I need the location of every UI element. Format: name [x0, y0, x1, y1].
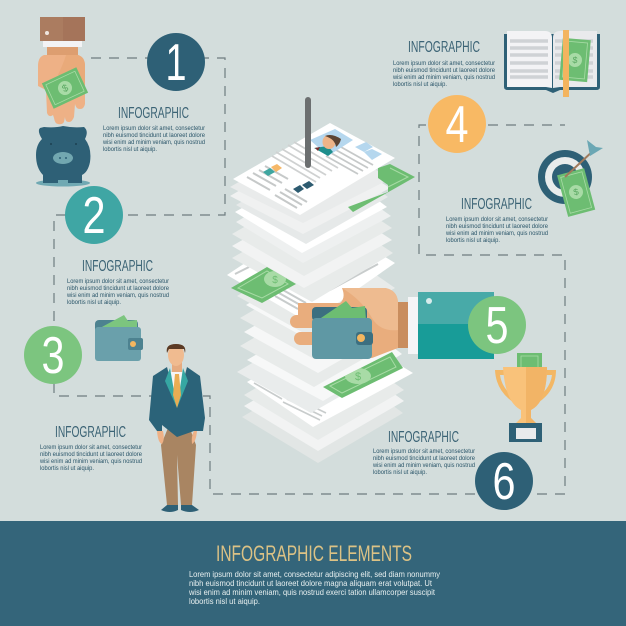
footer body text	[188, 569, 441, 606]
stack money left	[231, 267, 296, 303]
footer body text: lobortis nisl ut aiquip.	[189, 596, 260, 606]
text block 2: INFOGRAPHIC	[82, 258, 153, 275]
text block 1: wisi enim ad minim veniam, quis nostrud	[102, 139, 206, 146]
text block 6: nibh euismod tincidunt ut laoreet dolore	[373, 455, 476, 462]
circle 3: 3	[42, 327, 64, 385]
text block 3: Lorem ipsum dolor sit amet, consectetur	[40, 444, 142, 451]
text block 2: nibh euismod tincidunt ut laoreet dolore	[67, 285, 170, 292]
text block 3	[39, 424, 143, 472]
footer band	[0, 521, 626, 626]
stack money right	[323, 352, 403, 398]
text block 6: lobortis nisl ut aiquip.	[373, 469, 427, 476]
circle 2	[65, 186, 123, 245]
icon: piggy bank	[36, 126, 90, 186]
text block 4: lobortis nisl ut aiquip.	[393, 81, 447, 88]
nail spike	[305, 97, 311, 168]
icon: hand giving money: $	[61, 83, 71, 95]
footer body text: nibh euismod tincidunt ut laoreet dolore magna aliquam erat volutpat. Ut	[189, 578, 433, 588]
circle 1: 1	[166, 34, 186, 92]
stack money left: $	[272, 275, 278, 286]
text block 1: lobortis nisl ut aiquip.	[103, 146, 157, 153]
text block 5: Lorem ipsum dolor sit amet, consectetur	[446, 216, 548, 223]
text block 4: Lorem ipsum dolor sit amet, consectetur	[393, 60, 495, 67]
text block 6	[372, 429, 476, 476]
dashed connector path	[54, 58, 565, 494]
text block 1: INFOGRAPHIC	[118, 105, 189, 122]
footer body text: Lorem ipsum dolor sit amet, consectetur adipiscing elit, sed diam nonummy	[189, 569, 441, 579]
bill under top sheet	[348, 164, 415, 212]
text block 5	[445, 196, 549, 244]
text block 6: wisi enim ad minim veniam, quis nostrud	[372, 462, 476, 469]
text block 6: Lorem ipsum dolor sit amet, consectetur	[373, 448, 475, 455]
stack money right: $	[355, 371, 361, 383]
text block 1	[102, 105, 206, 153]
icon: target with dart and money: $	[572, 187, 580, 197]
text block 2: wisi enim ad minim veniam, quis nostrud	[66, 292, 170, 299]
text block 4: wisi enim ad minim veniam, quis nostrud	[392, 74, 496, 81]
text block 5: INFOGRAPHIC	[461, 196, 532, 213]
text block 5: wisi enim ad minim veniam, quis nostrud	[445, 230, 549, 237]
text block 5: lobortis nisl ut aiquip.	[446, 237, 500, 244]
footer body text: wisi enim ad minim veniam, quis nostrud exerci tation ullamcorper suscipit	[188, 587, 436, 597]
text block 4	[392, 39, 496, 88]
photo portrait	[314, 135, 341, 156]
circle 2: 2	[82, 187, 106, 245]
circle 3	[24, 326, 82, 385]
footer heading: INFOGRAPHIC ELEMENTS	[216, 541, 412, 566]
text block 2: Lorem ipsum dolor sit amet, consectetur	[67, 278, 169, 285]
hand holding wallet with teal sleeve	[290, 288, 494, 359]
text block 1: nibh euismod tincidunt ut laoreet dolore	[103, 132, 206, 139]
top document sheet	[233, 123, 395, 215]
text block 2: lobortis nisl ut aiquip.	[67, 299, 121, 306]
icon: trophy	[495, 353, 556, 442]
icon: open book with money	[504, 30, 600, 97]
text block 3: lobortis nisl ut aiquip.	[40, 465, 94, 472]
text block 3: INFOGRAPHIC	[55, 424, 126, 441]
circle 6	[475, 452, 533, 511]
text block 6: INFOGRAPHIC	[388, 429, 459, 446]
circle 4: 4	[446, 96, 468, 154]
circle 1	[147, 33, 205, 92]
text block 3: nibh euismod tincidunt ut laoreet dolore	[40, 451, 143, 458]
circle 5	[468, 296, 526, 355]
text block 4: INFOGRAPHIC	[408, 39, 480, 56]
icon: businessman	[149, 344, 205, 512]
text block 3: wisi enim ad minim veniam, quis nostrud	[39, 458, 143, 465]
text block 2	[66, 258, 170, 306]
circle 5: 5	[486, 297, 508, 355]
text block 4: nibh euismod tincidunt ut laoreet dolore	[393, 67, 496, 74]
icon: open book with money: $	[572, 55, 578, 65]
text block 5: nibh euismod tincidunt ut laoreet dolore	[446, 223, 549, 230]
icon: hand giving money	[38, 17, 88, 124]
circle 4	[428, 95, 486, 154]
icon: target with dart and money	[538, 140, 603, 217]
circle 6: 6	[492, 453, 516, 511]
icon: wallet	[95, 315, 143, 361]
paper stack	[227, 135, 413, 463]
text block 1: Lorem ipsum dolor sit amet, consectetur	[103, 125, 205, 132]
